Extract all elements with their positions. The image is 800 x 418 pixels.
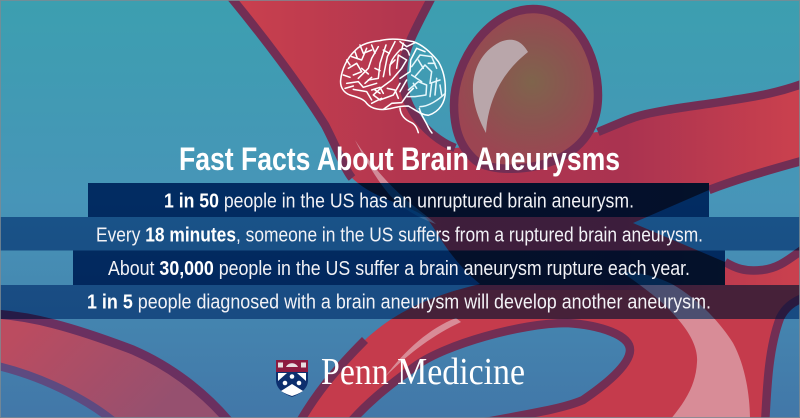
vessel highlights xyxy=(355,140,750,418)
sac highlight xyxy=(473,40,528,133)
blood vessel: main branching artery xyxy=(229,0,800,418)
fact bar 2: Every 18 minutes, someone in the US suffers from a ruptured brain aneurysm. xyxy=(96,224,703,246)
aneurysm sac xyxy=(454,9,598,169)
fact bar 1: 1 in 50 people in the US has an unruptured brain aneurysm. xyxy=(164,190,634,212)
title: Fast Facts About Brain Aneurysms xyxy=(179,141,620,177)
fact bar 1 xyxy=(88,183,709,217)
fact bar 4: 1 in 5 people diagnosed with a brain aneurysm will develop another aneurysm. xyxy=(87,292,711,314)
brain icon xyxy=(341,39,445,133)
blood vessel: lower left xyxy=(0,314,232,418)
fact bar 2 xyxy=(0,217,800,250)
fact bar 4 xyxy=(0,285,800,319)
icon: Penn shield xyxy=(276,360,308,397)
logo: Penn Medicine xyxy=(276,351,525,397)
fact bar 3: About 30,000 people in the US suffer a brain aneurysm rupture each year. xyxy=(108,258,690,280)
wordmark: Penn Medicine xyxy=(321,351,525,393)
fact bar 3 xyxy=(73,250,725,285)
